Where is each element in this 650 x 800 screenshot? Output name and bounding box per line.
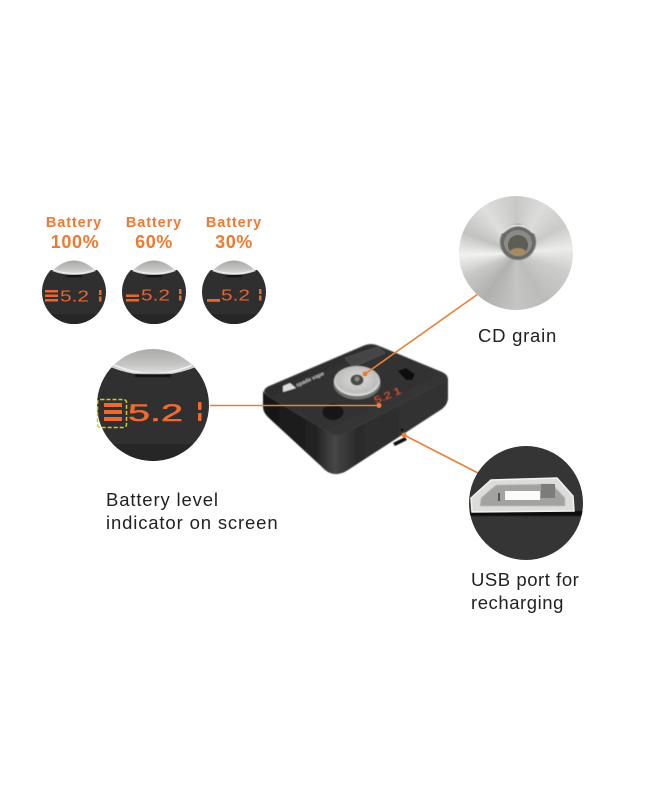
USB port caption: recharging xyxy=(471,592,564,613)
device screen readout: 5.2 1 xyxy=(373,385,403,407)
battery 100% label: Battery xyxy=(46,215,102,231)
device top face xyxy=(264,344,447,435)
small lens: 60%: 5.2 xyxy=(141,288,170,304)
USB port caption: USB port for xyxy=(471,569,579,590)
device: resistance reader box xyxy=(263,344,448,474)
metal contact disc xyxy=(334,366,380,400)
CD grain lens xyxy=(459,196,573,310)
device slide switch xyxy=(398,368,415,380)
device fire button xyxy=(322,404,344,420)
small lens: 100% xyxy=(42,260,106,324)
battery 30% label xyxy=(206,215,262,252)
small lens: 30%: 5.2 xyxy=(221,288,250,304)
battery 30% label: 30% xyxy=(215,232,253,252)
device brand logo xyxy=(283,371,325,392)
infographic canvas xyxy=(42,196,583,613)
device brand logo: spade vape xyxy=(295,371,325,389)
large lens: battery level indicator xyxy=(95,348,211,466)
battery 60% label: Battery xyxy=(126,215,182,231)
device USB port xyxy=(393,437,407,446)
USB port lens xyxy=(469,446,583,560)
USB port caption xyxy=(471,569,579,613)
battery 60% label xyxy=(126,215,182,252)
battery level caption: Battery level xyxy=(106,489,219,510)
device right front face xyxy=(336,378,448,474)
battery indicator dashed highlight xyxy=(98,400,126,428)
CD grain caption: CD grain xyxy=(478,325,557,346)
device display window xyxy=(345,347,385,367)
small lens: 100%: 5.2 xyxy=(60,288,89,306)
device left front face xyxy=(263,391,338,474)
battery 100% label xyxy=(46,215,102,252)
battery level caption: indicator on screen xyxy=(106,512,278,533)
small lens: 30% xyxy=(202,260,266,324)
leader line: USB port xyxy=(404,435,478,473)
large lens: battery level indicator: 5.2 xyxy=(128,400,183,427)
leader line: battery indicator xyxy=(210,404,379,406)
leader line: CD grain xyxy=(365,294,478,374)
battery 100% label: 100% xyxy=(51,232,99,252)
battery 30% label: Battery xyxy=(206,215,262,231)
small lens: 60% xyxy=(122,260,186,324)
battery level caption xyxy=(106,489,278,533)
battery 60% label: 60% xyxy=(135,232,173,252)
